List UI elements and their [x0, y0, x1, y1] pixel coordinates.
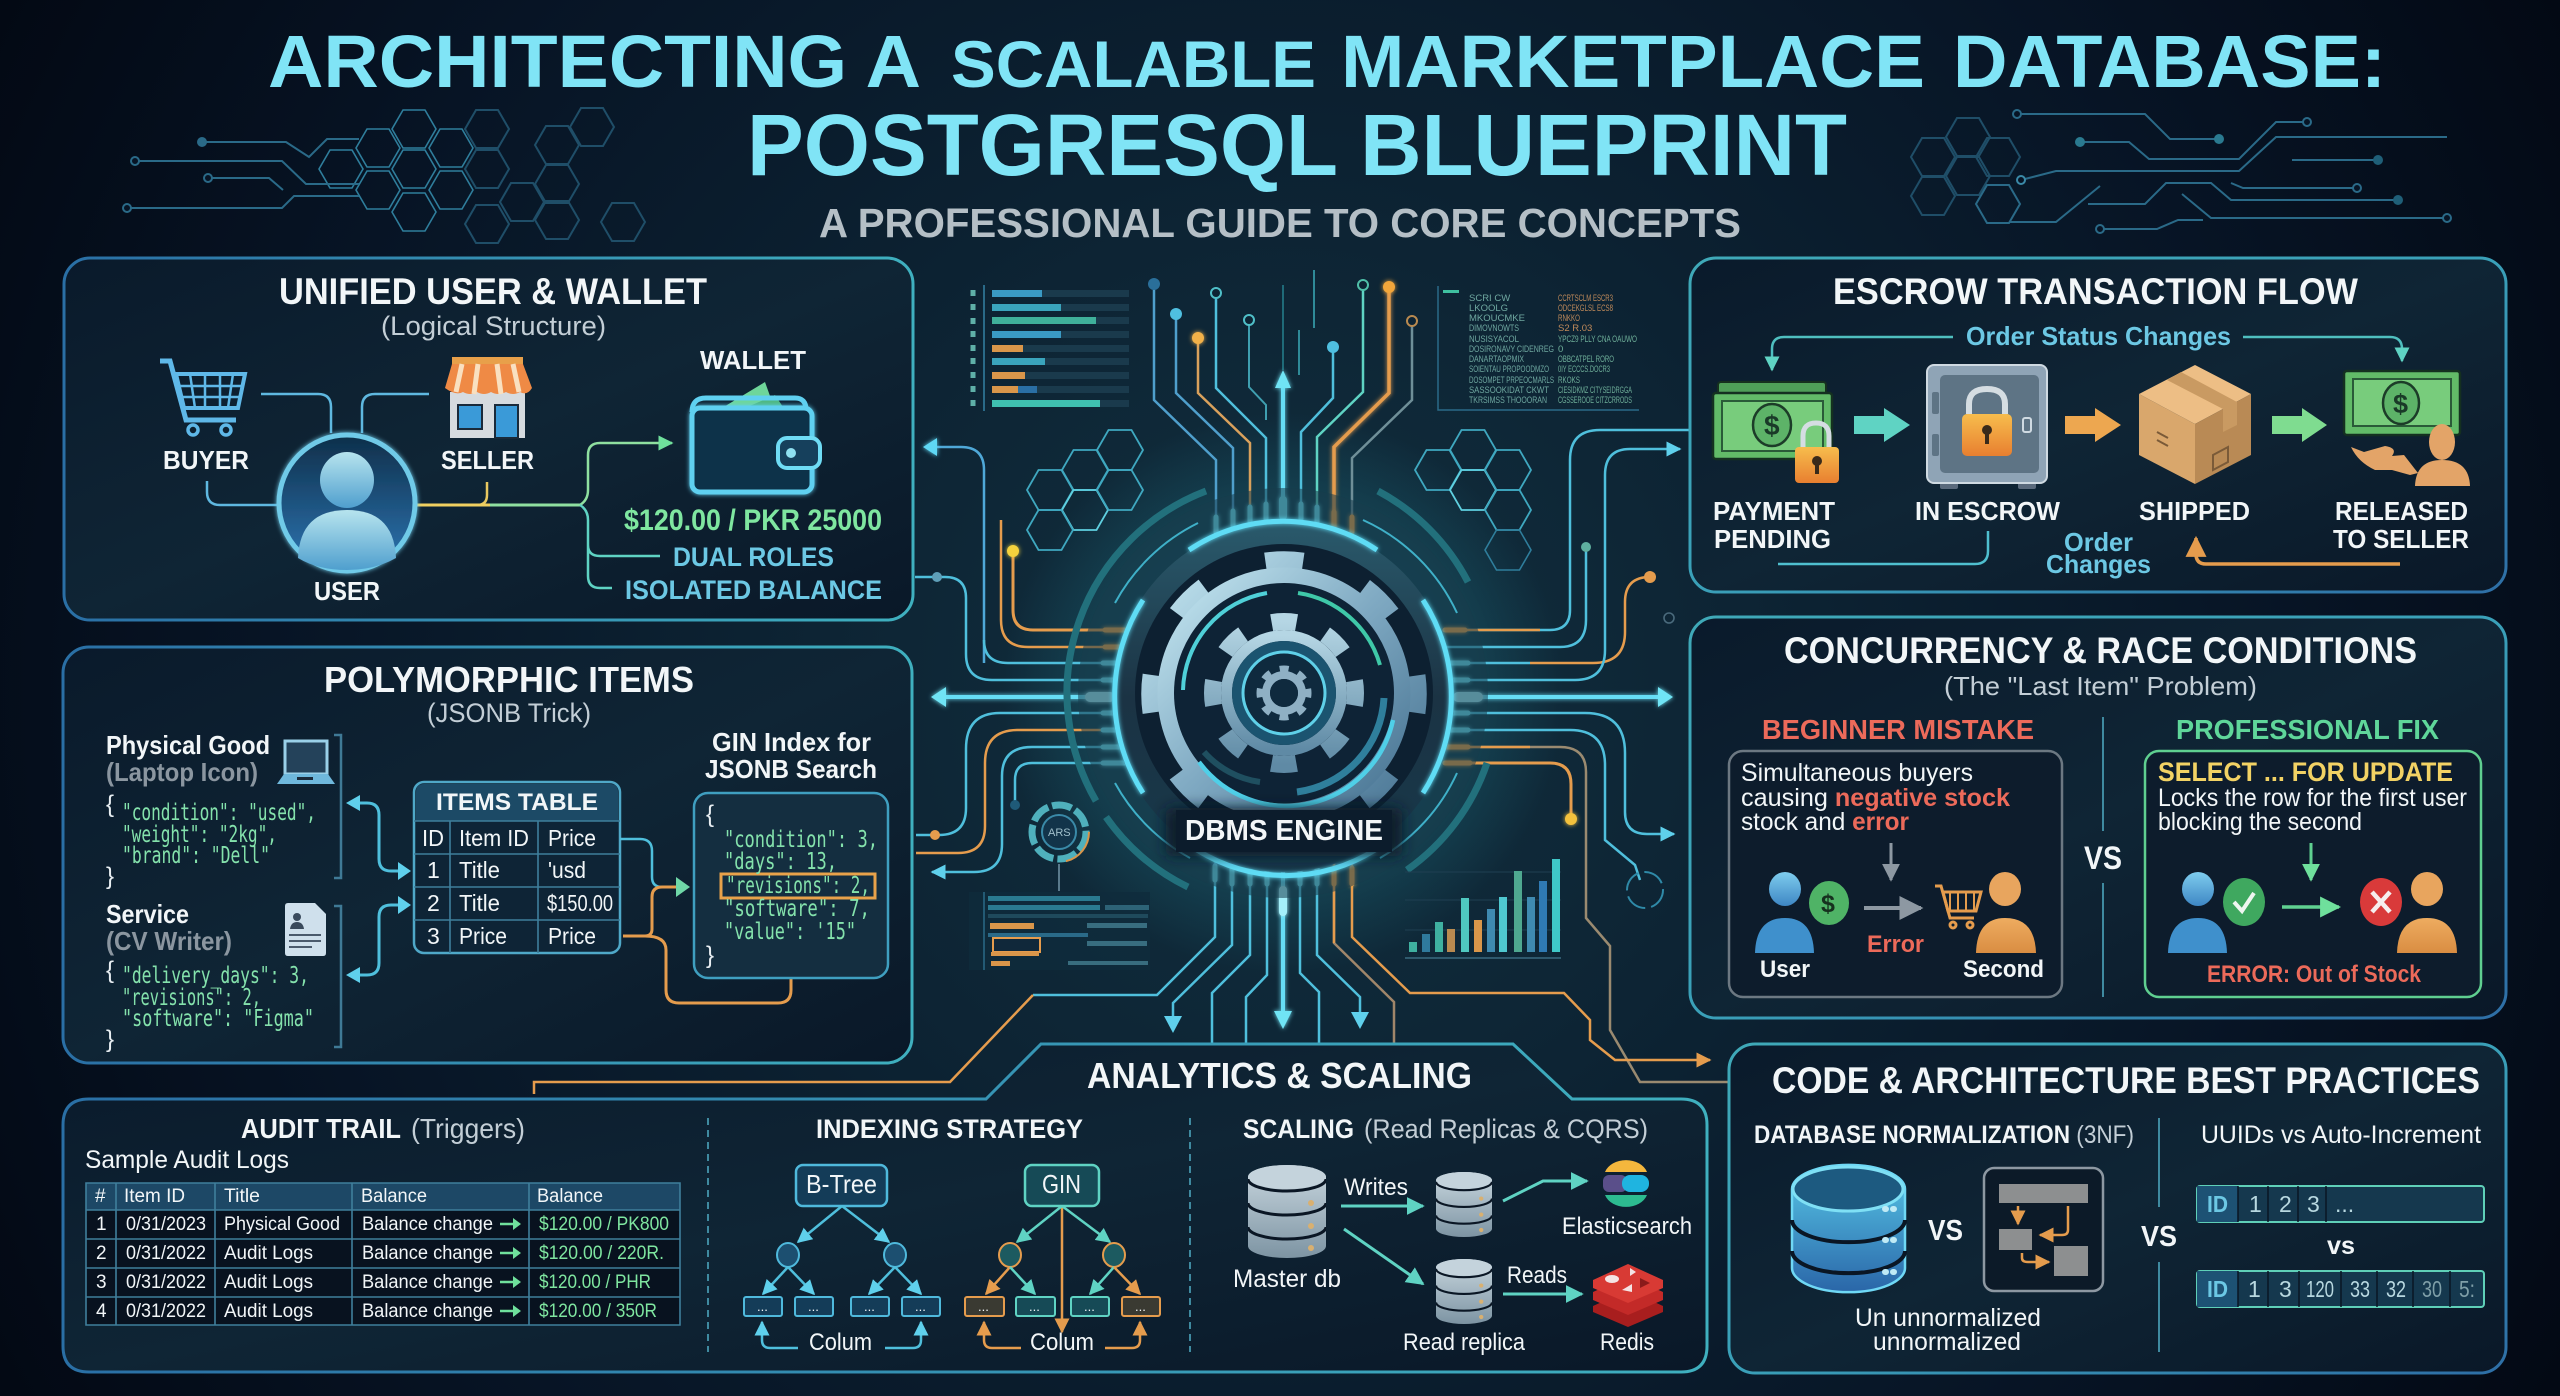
id row: auto-increment — [2197, 1186, 2484, 1222]
physical good block: "condition": "used", — [122, 800, 316, 826]
jsonb code box: } — [706, 942, 714, 969]
service block: (CV Writer) — [106, 926, 232, 956]
items table: $150.00 — [547, 890, 613, 916]
audit trail: AUDIT TRAIL — [241, 1113, 401, 1144]
icon: write replica — [1436, 1172, 1492, 1237]
b-tree diagram: ... — [808, 1299, 819, 1314]
audit table: 3 — [96, 1272, 107, 1293]
physical good block — [106, 730, 341, 890]
professional fix box: Locks the row for the first user — [2158, 784, 2467, 812]
scaling: (Read Replicas & CQRS) — [1364, 1114, 1648, 1144]
physical good block: "brand": "Dell" — [122, 843, 270, 869]
gin diagram — [965, 1165, 1160, 1356]
icon: document — [285, 903, 326, 956]
label: user: USER — [314, 576, 380, 606]
code listing: top right: SOIENTAU PROPOODMZO — [1469, 364, 1549, 375]
indexing strategy — [744, 1114, 1160, 1356]
code listing: top right: LKOOLG — [1469, 303, 1508, 314]
items table: Price — [548, 923, 596, 949]
unnormalized caption: Un unnormalized — [1855, 1304, 2041, 1332]
audit table: # — [95, 1186, 106, 1207]
step labels: IN ESCROW — [1915, 496, 2060, 526]
beginner mistake box: stock and error — [1741, 808, 1909, 836]
dbms engine label: DBMS ENGINE — [1185, 815, 1383, 847]
code listing: top right — [1438, 286, 1639, 410]
scaling: Writes — [1344, 1174, 1408, 1201]
connector arrows — [346, 795, 411, 983]
code listing: top right: CCRTSCLM ESCR3 — [1558, 293, 1613, 304]
audit table: $120.00 / 350R — [539, 1301, 657, 1322]
code listing: top right: ODCEKGLSL ECS8 — [1558, 303, 1613, 314]
order changes bottom: Changes — [2046, 549, 2151, 579]
b-tree diagram: B-Tree — [806, 1169, 877, 1199]
service block: "delivery_days": 3, — [122, 963, 309, 989]
label: dual roles: DUAL ROLES — [673, 542, 834, 572]
label: gin index — [705, 727, 877, 784]
vs: VS — [2141, 1221, 2177, 1253]
gear: small — [1260, 668, 1308, 718]
title: ARCHITECTING A — [268, 20, 921, 103]
physical good block: Physical Good — [106, 730, 270, 760]
audit table: Balance change — [362, 1214, 493, 1235]
title — [268, 20, 2386, 194]
wallet amount: $120.00 / PKR 25000 — [624, 504, 882, 537]
order status changes top — [1772, 321, 2402, 370]
id row: uuid: 33 — [2350, 1276, 2370, 1302]
vs small: vs — [2327, 1232, 2355, 1260]
audit table: Balance change — [362, 1272, 493, 1293]
service block: "revisions": 2, — [122, 985, 261, 1011]
icon: box — [2139, 365, 2251, 484]
label: buyer: BUYER — [163, 445, 249, 475]
icon: master database — [1248, 1165, 1326, 1258]
icon: user with dollar — [1755, 872, 1849, 953]
gear: large — [1150, 560, 1418, 828]
scaling: Read replica — [1403, 1329, 1526, 1356]
audit table: Item ID — [124, 1186, 185, 1207]
audit table — [86, 1183, 680, 1325]
audit table: Physical Good — [224, 1214, 340, 1235]
icon: normalized schema — [1984, 1168, 2103, 1291]
audit table: Balance — [537, 1186, 603, 1207]
audit table: $120.00 / PHR — [539, 1272, 651, 1293]
gauge: ARS: ARS — [1048, 827, 1071, 839]
icon: cart — [160, 361, 245, 435]
scaling: SCALING — [1243, 1114, 1354, 1144]
panel: escrow transaction flow — [1690, 258, 2506, 592]
service block: { — [106, 957, 114, 984]
items table: 2 — [427, 890, 440, 916]
items table: Title — [459, 890, 500, 916]
id row: uuid: 32 — [2386, 1276, 2406, 1302]
icon: user with dollar: $ — [1821, 890, 1835, 918]
code listing: top right: DOSIRONAVY CIDENREG — [1469, 344, 1554, 355]
b-tree diagram: ... — [915, 1299, 926, 1314]
panel: polymorphic items — [63, 647, 912, 1063]
uuid heading: UUIDs vs Auto-Increment — [2201, 1121, 2481, 1149]
physical good block: } — [106, 863, 114, 890]
id row: auto-increment: 3 — [2307, 1191, 2320, 1217]
unnormalized caption: unnormalized — [1873, 1328, 2021, 1356]
items table: Item ID — [459, 825, 529, 851]
scaling: Elasticsearch — [1562, 1213, 1692, 1240]
normalization heading: DATABASE NORMALIZATION (3NF) — [1754, 1121, 2134, 1149]
code listing: top right: S2 R.03 — [1558, 323, 1592, 334]
items table: 'usd — [548, 857, 586, 883]
id row: auto-increment: 1 — [2249, 1191, 2262, 1217]
icon: payment with lock: $ — [1764, 410, 1780, 441]
gin diagram: ... — [1135, 1299, 1146, 1314]
audit table: Balance — [361, 1186, 427, 1207]
icon: database blue — [1792, 1165, 1905, 1292]
code listing: top right: RKOKS — [1558, 375, 1580, 386]
panel: audit trail, analytics & scaling — [63, 1044, 1707, 1372]
id row: auto-increment: ... — [2335, 1191, 2354, 1217]
connector: table to GIN — [620, 839, 791, 1003]
order changes bottom: Order — [2064, 527, 2133, 557]
items table: Price — [548, 825, 596, 851]
code listing: top right: RNKKO — [1558, 313, 1580, 324]
id row: uuid: 5: — [2459, 1276, 2475, 1302]
label: seller: SELLER — [441, 445, 534, 475]
step labels: SHIPPED — [2139, 496, 2250, 526]
gin diagram: ... — [1029, 1299, 1040, 1314]
id row: uuid: 3 — [2279, 1276, 2292, 1302]
icon: laptop — [277, 741, 335, 784]
icon: second user — [1976, 872, 2036, 953]
beginner mistake box — [1729, 751, 2062, 997]
wires: right — [1445, 430, 1729, 1082]
subtitle: A PROFESSIONAL GUIDE TO CORE CONCEPTS — [819, 200, 1741, 246]
icon: safe — [1927, 365, 2047, 489]
physical good block: { — [106, 791, 114, 818]
wires: top — [1148, 270, 1417, 540]
b-tree diagram: ... — [757, 1299, 768, 1314]
subheading: (Logical Structure) — [381, 311, 606, 341]
audit table: 1 — [96, 1214, 107, 1235]
code listing: top right: DANARTAOPMIX — [1469, 354, 1524, 365]
professional fix box: SELECT ... FOR UPDATE — [2158, 757, 2453, 787]
id row: auto-increment: 2 — [2279, 1191, 2292, 1217]
indexing strategy: INDEXING STRATEGY — [816, 1114, 1083, 1144]
audit trail: (Triggers) — [411, 1113, 525, 1144]
subheading: (The "Last Item" Problem) — [1944, 671, 2257, 701]
code listing: top right: 0 — [1558, 344, 1563, 355]
code listing: top right: OBBCATPEL RORO — [1558, 354, 1614, 365]
code listing: top right: MKOUCMKE — [1469, 313, 1525, 324]
physical good block: (Laptop Icon) — [106, 757, 258, 787]
gauge: ARS — [1029, 802, 1089, 891]
audit table: 0/31/2022 — [126, 1301, 206, 1322]
icon: read replica — [1436, 1259, 1492, 1324]
code listing: top right: CGSSEROOE CITZCRRODS — [1558, 395, 1632, 406]
code listing: top right: DOSOMPET PRPEOCMARLS — [1469, 375, 1554, 386]
jsonb code box: "condition": 3, — [724, 827, 878, 853]
id row: uuid — [2197, 1271, 2484, 1307]
service block — [106, 899, 341, 1053]
icon: released to seller: $ — [2393, 389, 2408, 419]
decorative circuit: top right — [1911, 110, 2451, 233]
engine label backdrop — [1166, 808, 1402, 856]
id row: auto-increment: ID — [2207, 1191, 2228, 1217]
audit table: Audit Logs — [224, 1243, 313, 1264]
hexagon decoration — [1027, 430, 1531, 570]
icon: user with check — [2168, 872, 2265, 953]
professional heading: PROFESSIONAL FIX — [2176, 714, 2439, 745]
physical good block: "weight": "2kg", — [122, 822, 277, 848]
icon: user — [279, 435, 415, 571]
service block: "software": "Figma" — [122, 1006, 314, 1032]
dark disc — [1112, 522, 1454, 872]
gin diagram: ... — [1084, 1299, 1095, 1314]
beginner mistake box: Simultaneous buyers — [1741, 759, 1973, 787]
audit trail — [85, 1113, 680, 1325]
jsonb code box: "revisions": 2, — [726, 873, 870, 899]
code listing: top right: 0IY ECCCS.DOCR3 — [1558, 364, 1610, 375]
label: isolated balance: ISOLATED BALANCE — [625, 575, 882, 605]
b-tree diagram: ... — [864, 1299, 875, 1314]
connectors — [207, 394, 672, 588]
items table: 3 — [427, 923, 440, 949]
central circuit board — [534, 270, 1729, 1094]
halo — [1003, 413, 1563, 973]
jsonb code box: { — [706, 801, 714, 828]
items table: Price — [459, 923, 507, 949]
code listing: top right: NUSISYACOL — [1469, 334, 1519, 345]
label: gin index: JSONB Search — [705, 754, 877, 784]
jsonb code box: "value": '15" — [724, 919, 856, 945]
beginner heading: BEGINNER MISTAKE — [1762, 714, 2034, 745]
audit table: Balance change — [362, 1243, 493, 1264]
heading: UNIFIED USER & WALLET — [279, 271, 707, 312]
step labels: PAYMENT — [1713, 496, 1835, 526]
step labels: TO SELLER — [2333, 524, 2469, 554]
icon: released to seller — [2344, 371, 2470, 486]
audit table: 0/31/2022 — [126, 1243, 206, 1264]
order status changes top: Order Status Changes — [1966, 321, 2231, 351]
mini bar chart — [1405, 859, 1561, 958]
code listing: top right: SASSOOKIDAT CKWT — [1469, 385, 1549, 396]
audit table: 4 — [96, 1301, 107, 1322]
scaling: Reads — [1507, 1262, 1567, 1289]
audit table: Audit Logs — [224, 1272, 313, 1293]
items table — [414, 782, 620, 953]
code listing: top right: YPCZ9 PLLY CNA OAUWO — [1558, 334, 1637, 345]
b-tree diagram — [744, 1165, 940, 1356]
subheading: (JSONB Trick) — [427, 698, 591, 728]
title: POSTGRESQL BLUEPRINT — [747, 97, 1847, 194]
id row: uuid: 30 — [2422, 1276, 2442, 1302]
jsonb code box: "software": 7, — [724, 896, 870, 922]
beginner mistake box: User — [1760, 956, 1810, 983]
audit table: 0/31/2022 — [126, 1272, 206, 1293]
panel: unified user & wallet — [64, 258, 913, 620]
code listing: top right: SCRI CW — [1469, 293, 1510, 304]
bright ring arcs — [1115, 521, 1451, 876]
code listing: top right: TKRSIMSS THOOORAN — [1469, 395, 1547, 406]
audit table: Balance change — [362, 1301, 493, 1322]
wires: bottom — [534, 860, 1710, 1094]
audit table: Audit Logs — [224, 1301, 313, 1322]
audit table: 0/31/2023 — [126, 1214, 206, 1235]
connector pins — [1090, 500, 1478, 912]
audit trail: Sample Audit Logs — [85, 1146, 289, 1174]
dbms engine gear — [1067, 488, 1488, 898]
mini data table — [969, 892, 1150, 970]
audit table: $120.00 / 220R. — [539, 1243, 664, 1264]
label: wallet: WALLET — [700, 345, 806, 375]
icon: store — [445, 357, 532, 438]
vs: VS — [1928, 1215, 1963, 1247]
icon: elasticsearch — [1603, 1160, 1649, 1207]
panel: concurrency & race conditions — [1690, 617, 2506, 1018]
outer rings — [1067, 488, 1488, 898]
step labels: RELEASED — [2335, 496, 2468, 526]
scaling: Redis — [1600, 1329, 1654, 1356]
items table: ID — [422, 825, 444, 851]
panel: code & architecture best practices — [1729, 1044, 2506, 1373]
professional fix box — [2145, 751, 2481, 997]
gin diagram: ... — [978, 1299, 989, 1314]
icon: payment with lock — [1713, 382, 1839, 483]
items table: Title — [459, 857, 500, 883]
jsonb code box — [694, 793, 888, 978]
gin diagram: Colum — [1030, 1329, 1094, 1356]
order changes bottom — [1778, 527, 2400, 579]
audit table: 2 — [96, 1243, 107, 1264]
professional fix box: ERROR: Out of Stock — [2207, 961, 2422, 988]
title: SCALABLE — [951, 27, 1316, 101]
id row: uuid: 1 — [2248, 1276, 2261, 1302]
service block: Service — [106, 899, 189, 929]
items table: ITEMS TABLE — [436, 789, 598, 816]
data bars: top left — [973, 285, 1129, 411]
heading: CODE & ARCHITECTURE BEST PRACTICES — [1772, 1060, 2480, 1101]
icon: user with cross — [2360, 872, 2457, 953]
icon: wallet — [692, 382, 820, 492]
beginner mistake box: causing negative stock — [1741, 784, 2010, 812]
arrow — [2272, 408, 2327, 442]
beginner mistake box: Error — [1867, 931, 1924, 958]
arrow — [1854, 408, 1910, 442]
gin diagram: GIN — [1042, 1169, 1081, 1199]
heading: ESCROW TRANSACTION FLOW — [1833, 271, 2358, 312]
vs: VS — [2084, 840, 2122, 876]
audit table: $120.00 / PK800 — [539, 1214, 669, 1235]
audit table: Title — [224, 1186, 260, 1207]
unnormalized caption — [1855, 1304, 2041, 1356]
step labels: PENDING — [1714, 524, 1831, 554]
heading: analytics: ANALYTICS & SCALING — [1087, 1055, 1472, 1096]
step labels — [1713, 496, 2469, 554]
id row: uuid: ID — [2207, 1276, 2228, 1302]
service block: } — [106, 1026, 114, 1053]
id row: uuid: 120 — [2306, 1276, 2334, 1302]
scaling: Master db — [1233, 1265, 1341, 1293]
professional fix box: blocking the second — [2158, 808, 2362, 836]
decorative circuit: top left — [123, 108, 645, 243]
code listing: top right: CIESIDKMZ CITYSEIDRGGA — [1558, 385, 1632, 396]
label: gin index: GIN Index for — [712, 727, 871, 757]
scaling — [1233, 1114, 1692, 1356]
b-tree diagram: Colum — [809, 1329, 872, 1356]
icon: redis — [1593, 1264, 1663, 1327]
jsonb code box: "days": 13, — [724, 849, 837, 875]
icon: cart small — [1935, 886, 1981, 928]
gear: middle — [1212, 622, 1356, 764]
code listing: top right: DIMOVNOWTS — [1469, 323, 1519, 334]
arrow — [2065, 408, 2121, 442]
heading: CONCURRENCY & RACE CONDITIONS — [1784, 630, 2417, 671]
items table: 1 — [427, 857, 440, 883]
title: DATABASE: — [1953, 20, 2386, 103]
wires: left — [915, 438, 1125, 872]
title: MARKETPLACE — [1341, 20, 1925, 103]
heading: POLYMORPHIC ITEMS — [324, 659, 694, 700]
beginner mistake box: Second — [1963, 956, 2044, 983]
